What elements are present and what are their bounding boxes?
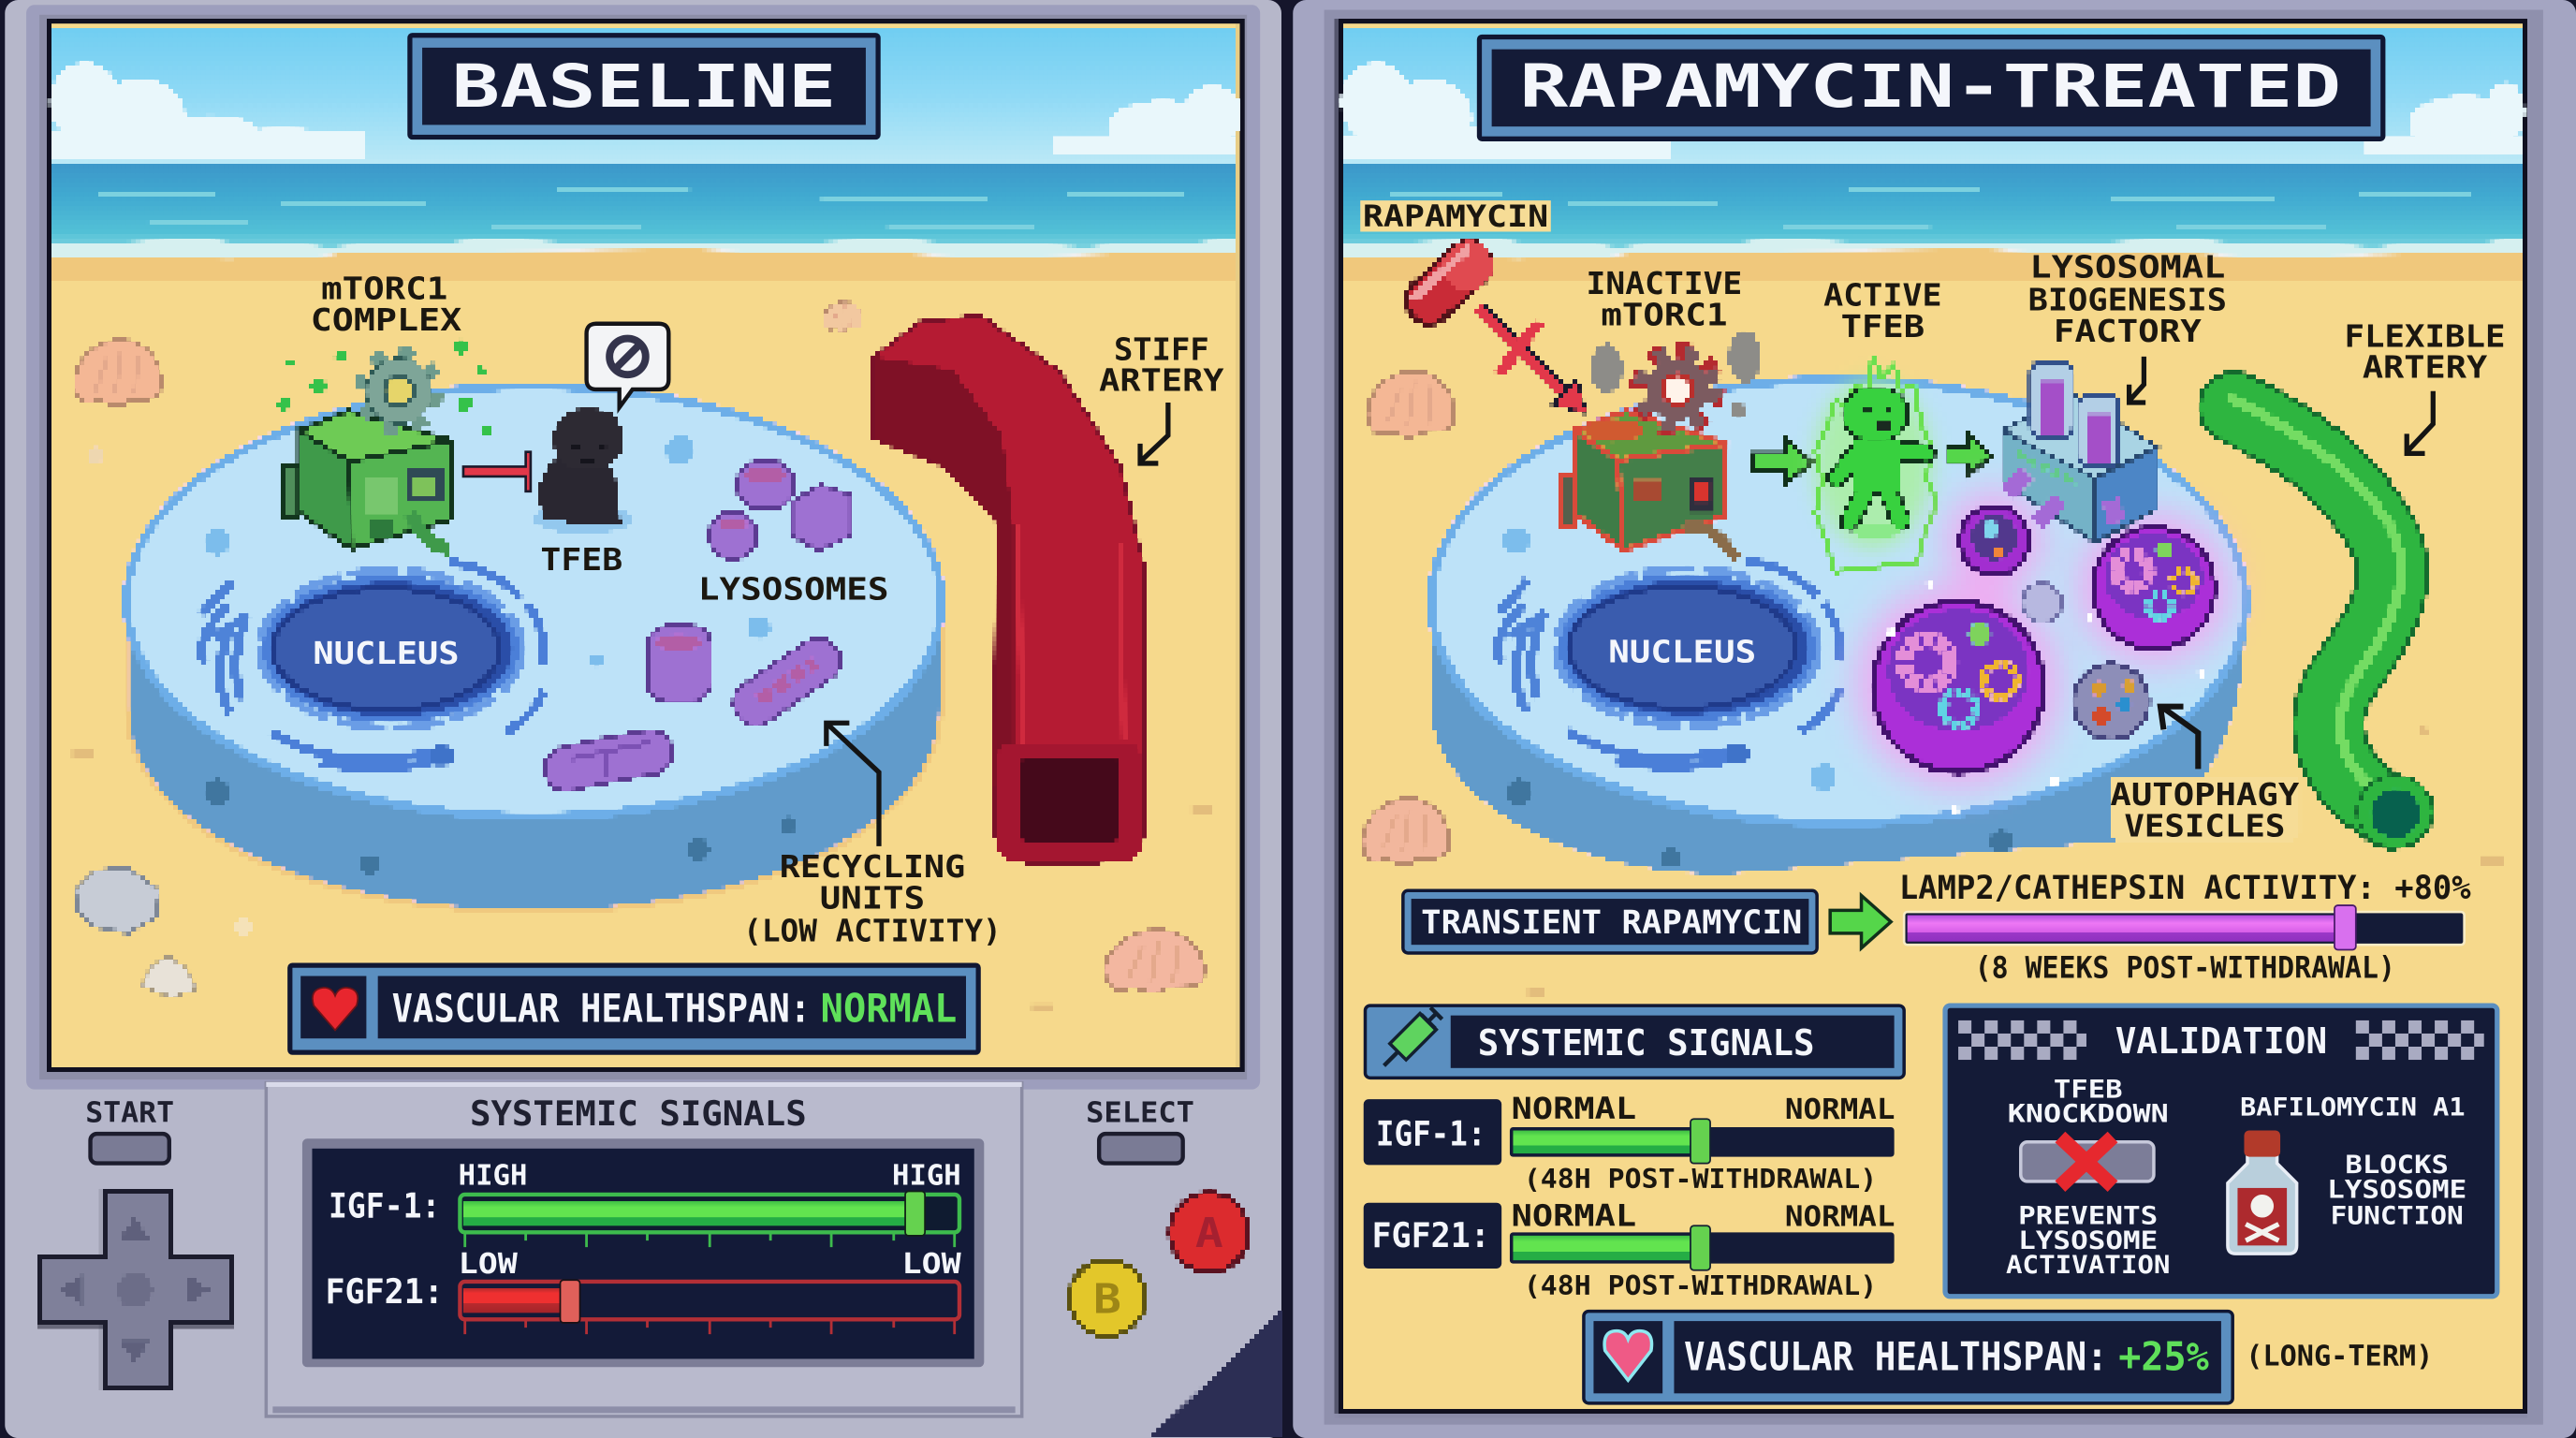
LAMP2 activity bar [1899, 869, 2471, 985]
button letter: B: B [1093, 1275, 1121, 1323]
factory [2002, 361, 2157, 542]
title: baseline [407, 33, 881, 139]
label: mTORC1 complex: COMPLEX [311, 301, 461, 338]
label: flexible artery: FLEXIBLE [2345, 317, 2506, 354]
label: stiff artery: STIFF [1114, 330, 1209, 367]
console body: baseline [5, 0, 1281, 1438]
shells and pebbles: baseline [72, 301, 1211, 1012]
buttons A and B [1070, 1193, 1249, 1336]
IGF-1 signal: (48H POST-WITHDRAWAL) [1524, 1164, 1877, 1195]
icon: poison bottle [2228, 1131, 2297, 1254]
lcd signal chart [302, 1138, 984, 1367]
label: rapamycin: RAPAMYCIN [1363, 200, 1548, 234]
label: active TFEB: ACTIVE [1823, 276, 1942, 313]
bar: FGF21 low: LOW [902, 1248, 961, 1281]
label: stiff artery [1099, 330, 1224, 463]
panel: validation: LYSOSOME [2018, 1227, 2158, 1255]
label: recycling units: RECYCLING [780, 848, 965, 885]
lysosomes: baseline [567, 462, 851, 777]
console body: rapamycin [1293, 0, 2576, 1438]
IGF-1 signal: IGF-1: [1376, 1113, 1486, 1153]
label: inactive mTORC1: INACTIVE [1587, 265, 1742, 301]
arrow: TFEB to factory [1947, 433, 1991, 478]
vascular healthspan: normal [287, 962, 981, 1055]
label: inactive mTORC1 [1587, 265, 1742, 333]
LAMP2 activity bar: LAMP2/CATHEPSIN ACTIVITY: +80% [1899, 869, 2471, 907]
label backing: autophagy [2110, 775, 2300, 842]
text: long-term: (LONG-TERM) [2246, 1340, 2433, 1372]
cell disc: treated [1431, 379, 2246, 874]
label: lysosomal biogenesis factory: BIOGENESIS [2028, 282, 2227, 318]
label: recycling units [743, 723, 1002, 949]
FGF21 signal: NORMAL [1785, 1200, 1895, 1233]
shells: treated [1363, 371, 2504, 996]
IGF-1 signal [1364, 1093, 1895, 1195]
nucleus: baseline [202, 562, 544, 769]
panel: validation: LYSOSOME [2327, 1176, 2466, 1204]
transient rapamycin: TRANSIENT RAPAMYCIN [1421, 903, 1802, 942]
FGF21 signal: (48H POST-WITHDRAWAL) [1524, 1270, 1877, 1301]
checker flags [1958, 1020, 2484, 1060]
IGF-1 signal: NORMAL [1512, 1093, 1636, 1126]
FGF21 signal [1364, 1199, 1895, 1301]
label: mTORC1 complex [311, 270, 461, 338]
label: nucleus treated: NUCLEUS [1608, 633, 1756, 669]
TFEB inactive figure [534, 409, 633, 534]
vascular healthspan: normal: VASCULAR HEALTHSPAN: [392, 986, 811, 1032]
rapamycin pill [1397, 232, 1501, 332]
panel: validation: BAFILOMYCIN A1 [2240, 1094, 2466, 1123]
transient rapamycin [1403, 890, 1817, 953]
nucleus: treated [1498, 560, 1840, 767]
icon: blocked device [2021, 1137, 2154, 1186]
FGF21 signal: FGF21: [1372, 1215, 1490, 1255]
panel: validation: ACTIVATION [2006, 1252, 2170, 1280]
label: stiff artery: ARTERY [1099, 362, 1224, 399]
title: rapamycin-treated [1477, 35, 2385, 141]
vascular healthspan: normal: NORMAL [821, 986, 957, 1032]
label: active TFEB: TFEB [1841, 308, 1925, 345]
panel: validation [1945, 1005, 2497, 1297]
autophagic lysosomes [1873, 506, 2215, 814]
FGF21 signal: NORMAL [1512, 1199, 1636, 1233]
button letter: A: A [1195, 1210, 1223, 1257]
title: rapamycin-treated: RAPAMYCIN-TREATED [1519, 51, 2341, 121]
bar: IGF-1 high: IGF-1: [329, 1186, 440, 1226]
icon: pink heart [1604, 1331, 1652, 1380]
text: select: SELECT [1086, 1097, 1194, 1130]
flexible artery [2231, 399, 2433, 848]
IGF-1 signal: NORMAL [1785, 1093, 1895, 1126]
console corner [1150, 1310, 1281, 1438]
d-pad [39, 1193, 230, 1388]
bar: FGF21 low: FGF21: [326, 1271, 444, 1312]
bar: IGF-1 high: HIGH [459, 1159, 527, 1192]
cell disc: baseline [126, 386, 942, 912]
vascular healthspan: +25%: +25% [2118, 1334, 2209, 1380]
bar: FGF21 low: LOW [459, 1248, 518, 1281]
label: autophagy vesicles [2110, 707, 2299, 844]
treated beach scene [1339, 23, 2525, 1413]
panel: validation: BLOCKS [2345, 1152, 2449, 1180]
systemic signals header: SYSTEMIC SIGNALS [1478, 1022, 1815, 1064]
baseline beach scene [50, 23, 1242, 1071]
label: flexible artery [2345, 317, 2506, 453]
label: recycling units: (LOW ACTIVITY) [743, 913, 1002, 949]
label: lysosomal biogenesis factory: FACTORY [2054, 313, 2202, 349]
label: recycling units: UNITS [820, 880, 925, 917]
active TFEB figure [1814, 355, 1937, 572]
label: autophagy vesicles: VESICLES [2124, 807, 2285, 844]
icon: syringe [1376, 1005, 1444, 1074]
bar: IGF-1 high [329, 1159, 961, 1247]
panel: validation: KNOCKDOWN [2008, 1101, 2169, 1129]
LAMP2 activity bar: (8 WEEKS POST-WITHDRAWAL) [1975, 951, 2395, 985]
panel: validation: TFEB [2054, 1076, 2123, 1104]
panel: validation: PREVENTS [2018, 1203, 2158, 1231]
label: TFEB: TFEB [540, 541, 622, 578]
inhibition arrow: mTORC1 to TFEB [463, 452, 531, 492]
glow around lysosomes [1856, 492, 2230, 787]
bar: FGF21 low [326, 1248, 961, 1334]
label: lysosomal biogenesis factory [2028, 249, 2227, 403]
label: nucleus baseline: NUCLEUS [313, 635, 460, 671]
vascular healthspan: +25% [1584, 1312, 2232, 1403]
stiff artery [874, 315, 1145, 862]
icon: speech bubble [587, 324, 668, 407]
label: inactive mTORC1: mTORC1 [1601, 297, 1727, 333]
label: active TFEB [1823, 276, 1942, 345]
inhibition arrow [1479, 307, 1587, 414]
vascular healthspan: +25%: VASCULAR HEALTHSPAN: [1684, 1334, 2108, 1380]
panel: validation: VALIDATION [2115, 1020, 2327, 1063]
title: baseline: BASELINE [452, 51, 836, 121]
panel: validation: FUNCTION [2331, 1203, 2464, 1231]
button: start [91, 1134, 169, 1164]
icon: heart [313, 988, 358, 1030]
arrow: mTORC1 to TFEB [1751, 437, 1812, 487]
label: lysosomes: LYSOSOMES [698, 571, 889, 608]
text: start: START [85, 1097, 174, 1130]
button: select [1099, 1134, 1183, 1164]
inactive mTORC1 [1560, 330, 1761, 559]
heading: systemic signals: SYSTEMIC SIGNALS [470, 1093, 807, 1134]
label: autophagy vesicles: AUTOPHAGY [2110, 776, 2299, 813]
label: lysosomal biogenesis factory: LYSOSOMAL [2029, 249, 2225, 286]
bar: IGF-1 high: HIGH [892, 1159, 961, 1192]
systemic signals header [1365, 1005, 1904, 1078]
label: mTORC1 complex: mTORC1 [321, 270, 447, 306]
mTORC1 cube and gear [278, 339, 493, 549]
label: flexible artery: ARTERY [2363, 349, 2487, 386]
arrow: transient [1830, 896, 1891, 948]
